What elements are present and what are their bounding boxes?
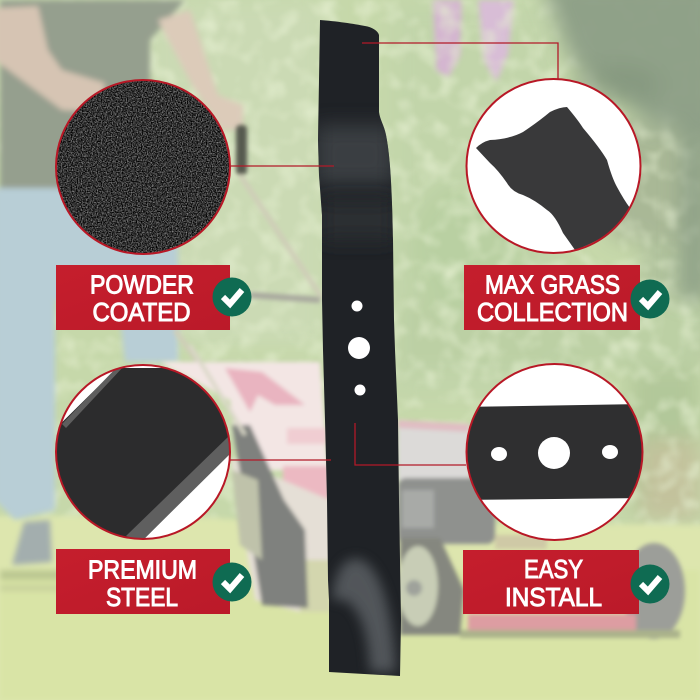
zoom circle: powder texture xyxy=(55,79,231,255)
label: max grass collection: MAX GRASS xyxy=(485,270,620,300)
label: premium steel: PREMIUM xyxy=(88,554,197,584)
icon: check badge xyxy=(630,280,670,318)
label: easy install: EASY xyxy=(524,554,583,584)
callout leader lines xyxy=(230,43,558,465)
icon: check badge xyxy=(212,562,252,602)
blade xyxy=(315,20,401,676)
label: easy install xyxy=(463,550,639,614)
mounting holes xyxy=(348,300,370,396)
icon: check badge xyxy=(630,564,670,604)
label: powder coated: COATED xyxy=(92,297,190,327)
mower xyxy=(160,125,685,639)
panel: max grass collection xyxy=(464,79,670,330)
panel: easy install xyxy=(460,364,670,614)
lawn xyxy=(0,516,700,700)
label: premium steel xyxy=(56,549,230,614)
label: max grass collection xyxy=(464,265,640,330)
man xyxy=(0,0,243,565)
label: max grass collection: COLLECTION xyxy=(477,297,628,327)
panel: premium steel xyxy=(40,365,252,614)
icon: check badge xyxy=(212,278,252,316)
label: easy install: INSTALL xyxy=(505,582,602,612)
label: powder coated xyxy=(56,265,230,330)
zoom circle: mounting holes xyxy=(460,364,645,540)
mottled foliage xyxy=(0,0,700,525)
zoom circle: steel edge xyxy=(55,364,231,540)
zoom circle: lifted blade tip xyxy=(466,79,640,253)
label: powder coated: POWDER xyxy=(90,270,194,300)
panel: powder coated xyxy=(55,79,252,330)
label: premium steel: STEEL xyxy=(106,582,178,612)
